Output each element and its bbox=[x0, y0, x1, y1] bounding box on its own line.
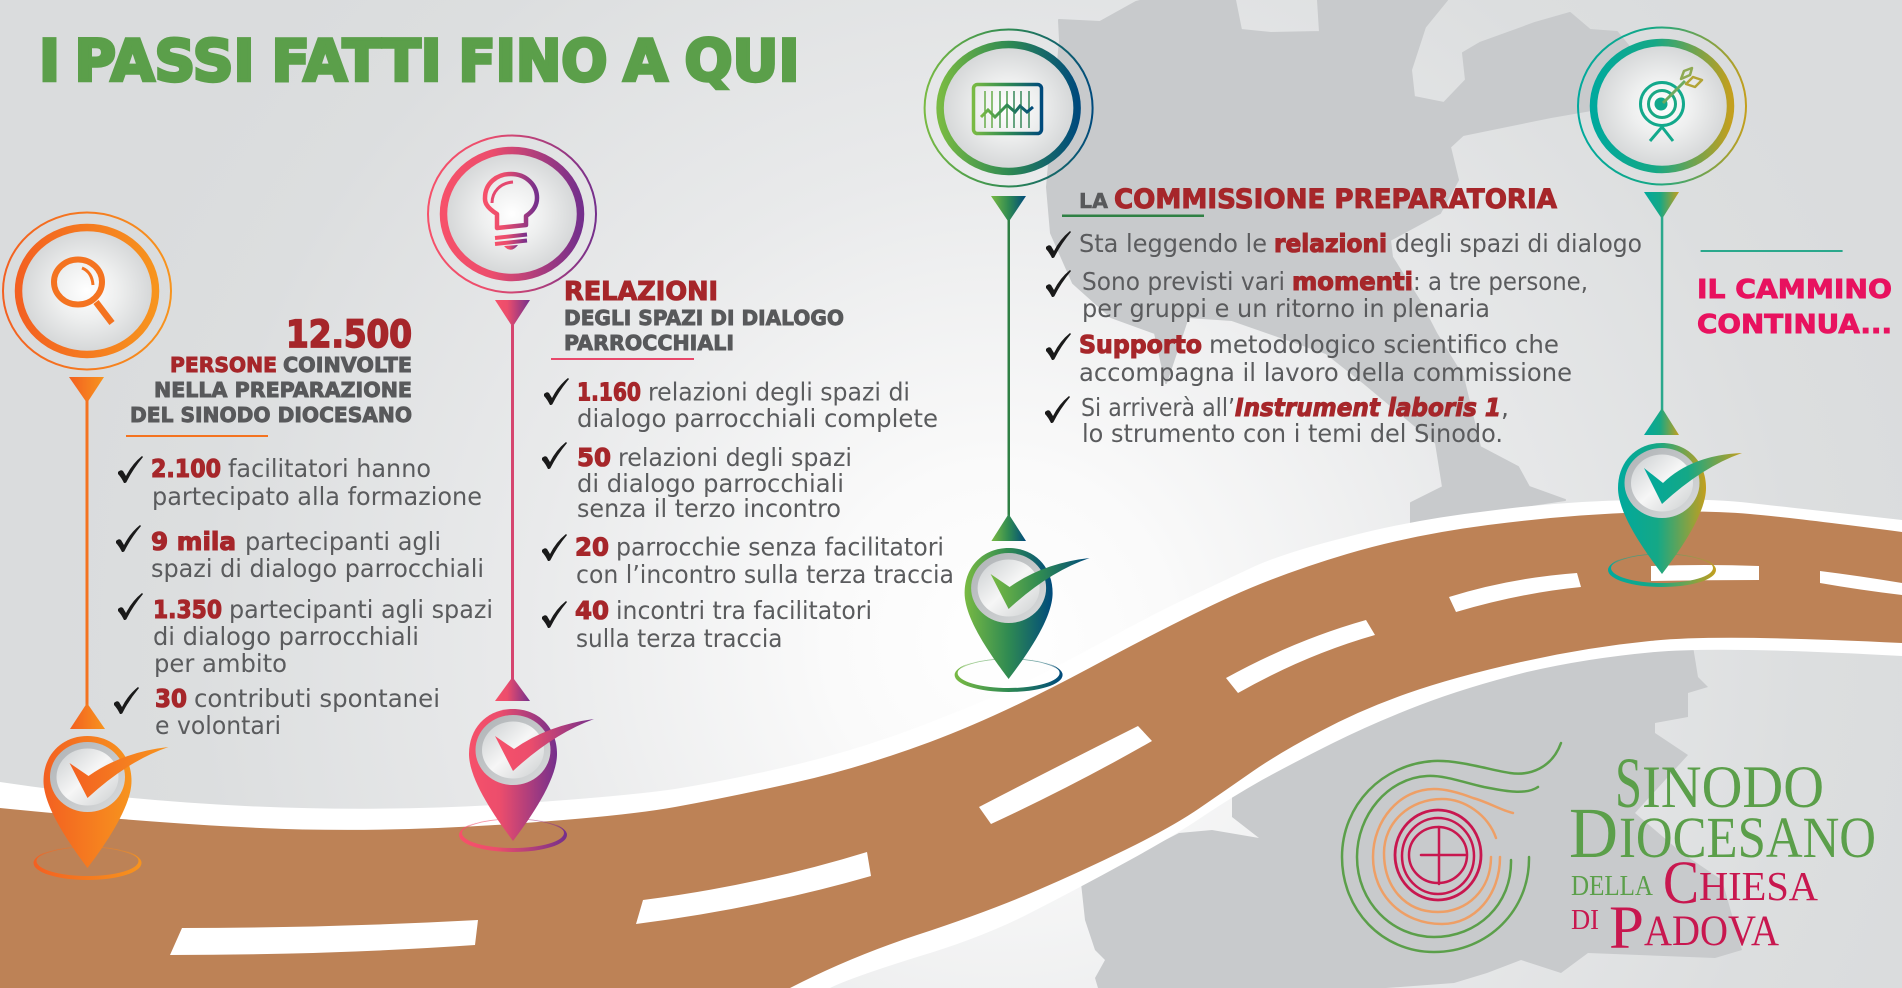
title: PASSI bbox=[74, 28, 254, 94]
arrow head bottom bbox=[991, 514, 1026, 541]
list item: supporto: Supporto bbox=[1079, 330, 1202, 359]
panel: 12.500 persone coinvolte bbox=[114, 313, 493, 740]
wordmark: DI bbox=[1571, 905, 1599, 936]
wordmark: HIESA bbox=[1699, 863, 1818, 909]
list item: 9 mila partecipanti: partecipanti agli bbox=[245, 527, 441, 556]
connector line bbox=[86, 400, 88, 705]
list item: 50 relazioni: di dialogo parrocchiali bbox=[577, 469, 844, 498]
road centre dashes bbox=[170, 565, 1902, 955]
list item: momenti: Sono previsti vari bbox=[1082, 267, 1285, 296]
list item: 40 incontri: incontri tra facilitatori bbox=[616, 596, 872, 625]
heading: 12.500 persone coinvolte bbox=[126, 313, 412, 437]
list item: 1.350 partecipanti: partecipanti agli spazi bbox=[229, 595, 493, 624]
heading: relazioni degli spazi di dialogo bbox=[551, 277, 844, 360]
list item: supporto bbox=[1046, 330, 1572, 387]
logo: sinodo diocesano bbox=[1342, 743, 1876, 962]
list item: relazioni: degli spazi di dialogo bbox=[1395, 229, 1642, 258]
heading: 12.500 persone coinvolte: COINVOLTE bbox=[283, 353, 412, 377]
list item: 50 relazioni: 50 bbox=[577, 443, 611, 472]
list item: 2.100 facilitatori: 2.100 bbox=[151, 454, 221, 483]
list item: instrument laboris: lo strumento con i temi del Sinodo. bbox=[1082, 419, 1503, 448]
wordmark: P bbox=[1609, 895, 1644, 962]
list item: 50 relazioni: relazioni degli spazi bbox=[618, 443, 852, 472]
list item: 2.100 facilitatori: partecipato alla formazione bbox=[152, 482, 482, 511]
pin marker bbox=[34, 736, 168, 880]
list item: momenti bbox=[1046, 267, 1588, 323]
list item: instrument laboris: , bbox=[1501, 393, 1509, 422]
list item: 9 mila partecipanti bbox=[116, 525, 484, 583]
heading: la commissione preparatoria: LA bbox=[1079, 189, 1109, 213]
list item: momenti: momenti bbox=[1292, 267, 1413, 296]
list item: supporto: accompagna il lavoro della commissione bbox=[1079, 358, 1572, 387]
step 1: orange marker column bbox=[3, 212, 171, 880]
wordmark bbox=[1569, 743, 1876, 962]
icon: chart badge bbox=[925, 30, 1093, 186]
road bbox=[0, 499, 1902, 988]
title: FINO bbox=[458, 28, 608, 94]
heading: la commissione preparatoria: COMMISSIONE PREPARATORIA bbox=[1114, 184, 1557, 215]
arrow head bottom bbox=[495, 677, 530, 701]
connector line bbox=[1008, 220, 1010, 516]
title: FATTI bbox=[272, 28, 442, 94]
arrow head top bbox=[495, 300, 530, 327]
icon: light bulb badge bbox=[428, 136, 596, 292]
list item: 1.350 partecipanti: 1.350 bbox=[153, 595, 222, 624]
list item: momenti: per gruppi e un ritorno in plenaria bbox=[1082, 294, 1490, 323]
list item: 20 parrocchie: parrocchie senza facilitatori bbox=[616, 532, 944, 562]
list item: 30 contributi: e volontari bbox=[155, 711, 281, 740]
list item: 1.160 relazioni: relazioni degli spazi di bbox=[648, 378, 910, 406]
connector line bbox=[1661, 217, 1663, 410]
wordmark: S bbox=[1615, 743, 1642, 823]
heading: relazioni degli spazi di dialogo: RELAZIONI bbox=[564, 277, 718, 307]
list item: 1.350 partecipanti bbox=[118, 593, 493, 678]
road white border bbox=[0, 499, 1902, 988]
arrow head top bbox=[1644, 192, 1679, 219]
pin marker bbox=[955, 548, 1090, 692]
list item: supporto: metodologico scientifico che bbox=[1209, 330, 1559, 359]
title bbox=[39, 28, 800, 94]
list item: relazioni: relazioni bbox=[1274, 229, 1387, 258]
title: QUI bbox=[684, 28, 800, 94]
wordmark: C bbox=[1663, 850, 1699, 917]
arrow head bottom bbox=[1644, 408, 1679, 435]
list item: 9 mila partecipanti: spazi di dialogo parrocchiali bbox=[151, 554, 484, 583]
step 3: green marker column bbox=[925, 30, 1093, 692]
list item: 40 incontri: sulla terza traccia bbox=[576, 624, 782, 653]
arrow head top bbox=[69, 377, 104, 403]
callout: il cammino continua bbox=[1697, 250, 1892, 340]
callout: il cammino continua: IL CAMMINO bbox=[1697, 275, 1892, 305]
arrow head bottom bbox=[70, 703, 105, 729]
list item: 20 parrocchie: 20 bbox=[575, 532, 609, 562]
list item: 1.160 relazioni bbox=[544, 378, 938, 433]
list item: 30 contributi: contributi spontanei bbox=[194, 684, 440, 713]
list item: relazioni: Sta leggendo le bbox=[1079, 229, 1267, 258]
list item: 40 incontri: 40 bbox=[575, 596, 609, 625]
icon: spiral with cross bbox=[1342, 743, 1561, 952]
list item: 1.160 relazioni: 1.160 bbox=[577, 378, 641, 406]
icon: target badge bbox=[1578, 28, 1746, 184]
list item: 20 parrocchie: con l’incontro sulla terza traccia bbox=[576, 560, 954, 589]
road surface bbox=[0, 512, 1902, 988]
list item: 1.350 partecipanti: di dialogo parrocchiali bbox=[153, 622, 419, 651]
list item: 1.160 relazioni: dialogo parrocchiali complete bbox=[577, 404, 938, 433]
step 4: teal marker column bbox=[1578, 28, 1746, 587]
connector line bbox=[511, 325, 514, 679]
list item: instrument laboris: Instrument laboris 1 bbox=[1235, 393, 1501, 422]
map of Italy silhouette bbox=[1047, 0, 1640, 523]
list item: 40 incontri bbox=[542, 596, 872, 653]
heading: 12.500 persone coinvolte: PERSONE bbox=[170, 353, 277, 377]
icon: magnifier badge bbox=[3, 212, 171, 370]
list item: 30 contributi: 30 bbox=[155, 684, 187, 713]
title: A bbox=[624, 28, 668, 94]
map of Italy, southern part bbox=[1081, 640, 1742, 988]
list item: momenti: : a tre persone, bbox=[1413, 267, 1588, 296]
pin marker bbox=[1608, 443, 1742, 587]
list item: 1.350 partecipanti: per ambito bbox=[154, 649, 287, 678]
wordmark: ADOVA bbox=[1644, 908, 1779, 955]
wordmark: INODO bbox=[1642, 754, 1824, 820]
list item: 50 relazioni bbox=[542, 442, 852, 523]
list item: instrument laboris bbox=[1045, 393, 1509, 448]
heading: relazioni degli spazi di dialogo: DEGLI SPAZI DI DIALOGO bbox=[564, 306, 844, 330]
panel: la commissione preparatoria bbox=[1045, 184, 1642, 448]
title: I bbox=[39, 28, 60, 94]
step 2: pink marker column bbox=[428, 136, 596, 852]
arrow head top bbox=[991, 196, 1026, 222]
heading: 12.500 persone coinvolte: 12.500 bbox=[286, 313, 412, 356]
list item: 50 relazioni: senza il terzo incontro bbox=[577, 494, 841, 523]
heading: relazioni degli spazi di dialogo: PARROCCHIALI bbox=[564, 331, 734, 355]
list item: 2.100 facilitatori: facilitatori hanno bbox=[228, 454, 431, 483]
list item: 9 mila partecipanti: 9 mila bbox=[151, 527, 236, 556]
wordmark: DELLA bbox=[1571, 871, 1654, 902]
wordmark: D bbox=[1569, 793, 1618, 873]
list item: 20 parrocchie bbox=[542, 532, 954, 589]
pin marker bbox=[459, 709, 594, 852]
list item: instrument laboris: Si arriverà all’ bbox=[1081, 393, 1235, 422]
panel: relazioni bbox=[542, 277, 954, 653]
list item: 2.100 facilitatori bbox=[118, 454, 482, 511]
list item: relazioni bbox=[1046, 229, 1642, 258]
heading: 12.500 persone coinvolte: NELLA PREPARAZIONE bbox=[154, 378, 412, 402]
heading: 12.500 persone coinvolte: DEL SINODO DIOCESANO bbox=[130, 403, 412, 427]
list item: 30 contributi bbox=[114, 684, 440, 740]
callout: il cammino continua: CONTINUA... bbox=[1697, 310, 1892, 340]
